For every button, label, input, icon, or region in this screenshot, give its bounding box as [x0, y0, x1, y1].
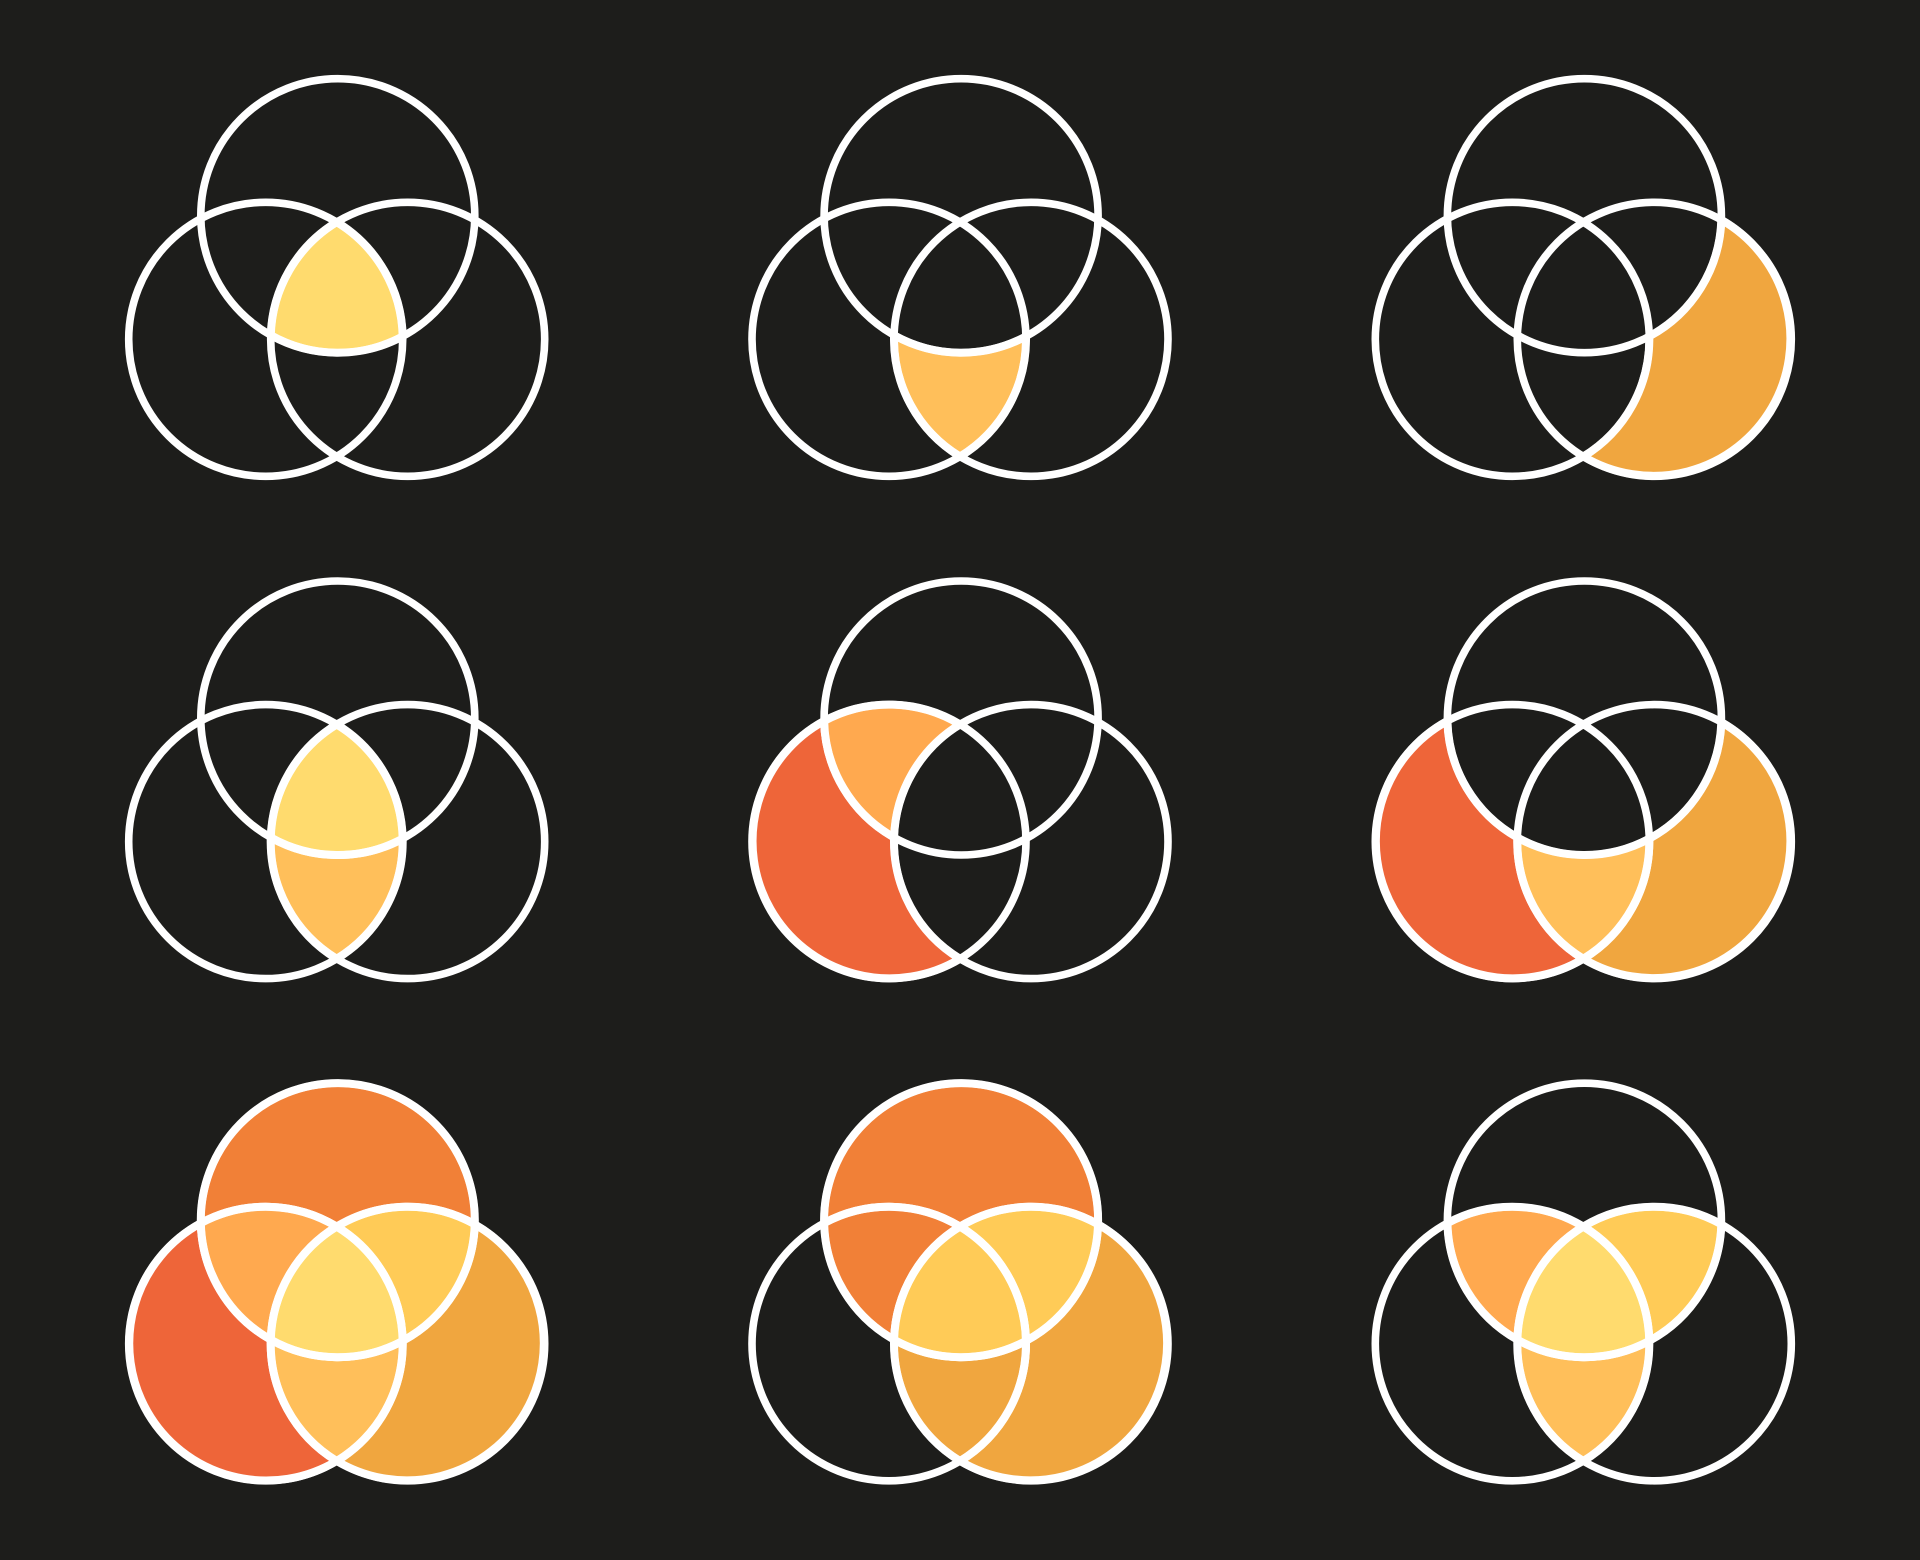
Venn 6: left crescent, lower lens and right crescent highlighted — [1375, 581, 1791, 979]
region: top crescent — [824, 1083, 1098, 1227]
circle outlines — [1375, 79, 1791, 476]
region: upper-left lens — [824, 705, 960, 837]
region: top crescent — [201, 1083, 475, 1227]
region: upper-left lens — [1447, 1207, 1583, 1340]
region: upper-left lens — [201, 1207, 337, 1340]
Venn 5: left crescent and upper-left lens highlighted — [752, 581, 1168, 979]
region: centre — [894, 1227, 1026, 1357]
Venn 2: lower lens highlighted — [752, 79, 1168, 476]
region: right crescent — [960, 1224, 1167, 1480]
circle outlines — [752, 79, 1168, 476]
region: upper-right lens — [960, 1207, 1098, 1341]
region: lower lens — [894, 335, 1026, 456]
region: centre — [271, 222, 403, 353]
region: left crescent — [1376, 721, 1583, 978]
circle outlines — [129, 1083, 545, 1481]
region: upper-left lens — [824, 1207, 960, 1340]
Venn 9: centre and three lenses highlighted — [1375, 1083, 1791, 1481]
region: right crescent — [1583, 220, 1790, 476]
circle outlines — [129, 79, 545, 476]
Venn 1: centre region highlighted — [129, 79, 545, 476]
region: lower lens — [1517, 1340, 1649, 1461]
region: left crescent — [129, 1223, 337, 1480]
Venn 8: all regions except left crescent highlighted — [752, 1083, 1168, 1481]
region: lower lens — [271, 837, 403, 959]
region: centre — [1517, 1227, 1649, 1357]
region: lower lens — [271, 1340, 403, 1461]
region: lower lens — [1517, 837, 1649, 959]
region: lower lens — [894, 1340, 1026, 1461]
region: centre — [271, 1227, 403, 1357]
region: left crescent — [753, 721, 960, 978]
circle outlines — [1375, 581, 1791, 979]
circle outlines — [752, 581, 1168, 979]
region: right crescent — [1583, 722, 1790, 978]
region: upper-right lens — [1583, 1207, 1721, 1341]
Venn 3: right crescent highlighted — [1375, 79, 1791, 476]
circle outlines — [129, 581, 545, 979]
region: centre — [271, 724, 403, 855]
circle outlines — [752, 1083, 1168, 1481]
Venn 4: centre and lower lens highlighted — [129, 581, 545, 979]
region: right crescent — [337, 1224, 544, 1480]
Venn 7: all regions highlighted — [129, 1083, 545, 1481]
circle outlines — [1375, 1083, 1791, 1481]
region: upper-right lens — [337, 1207, 475, 1341]
